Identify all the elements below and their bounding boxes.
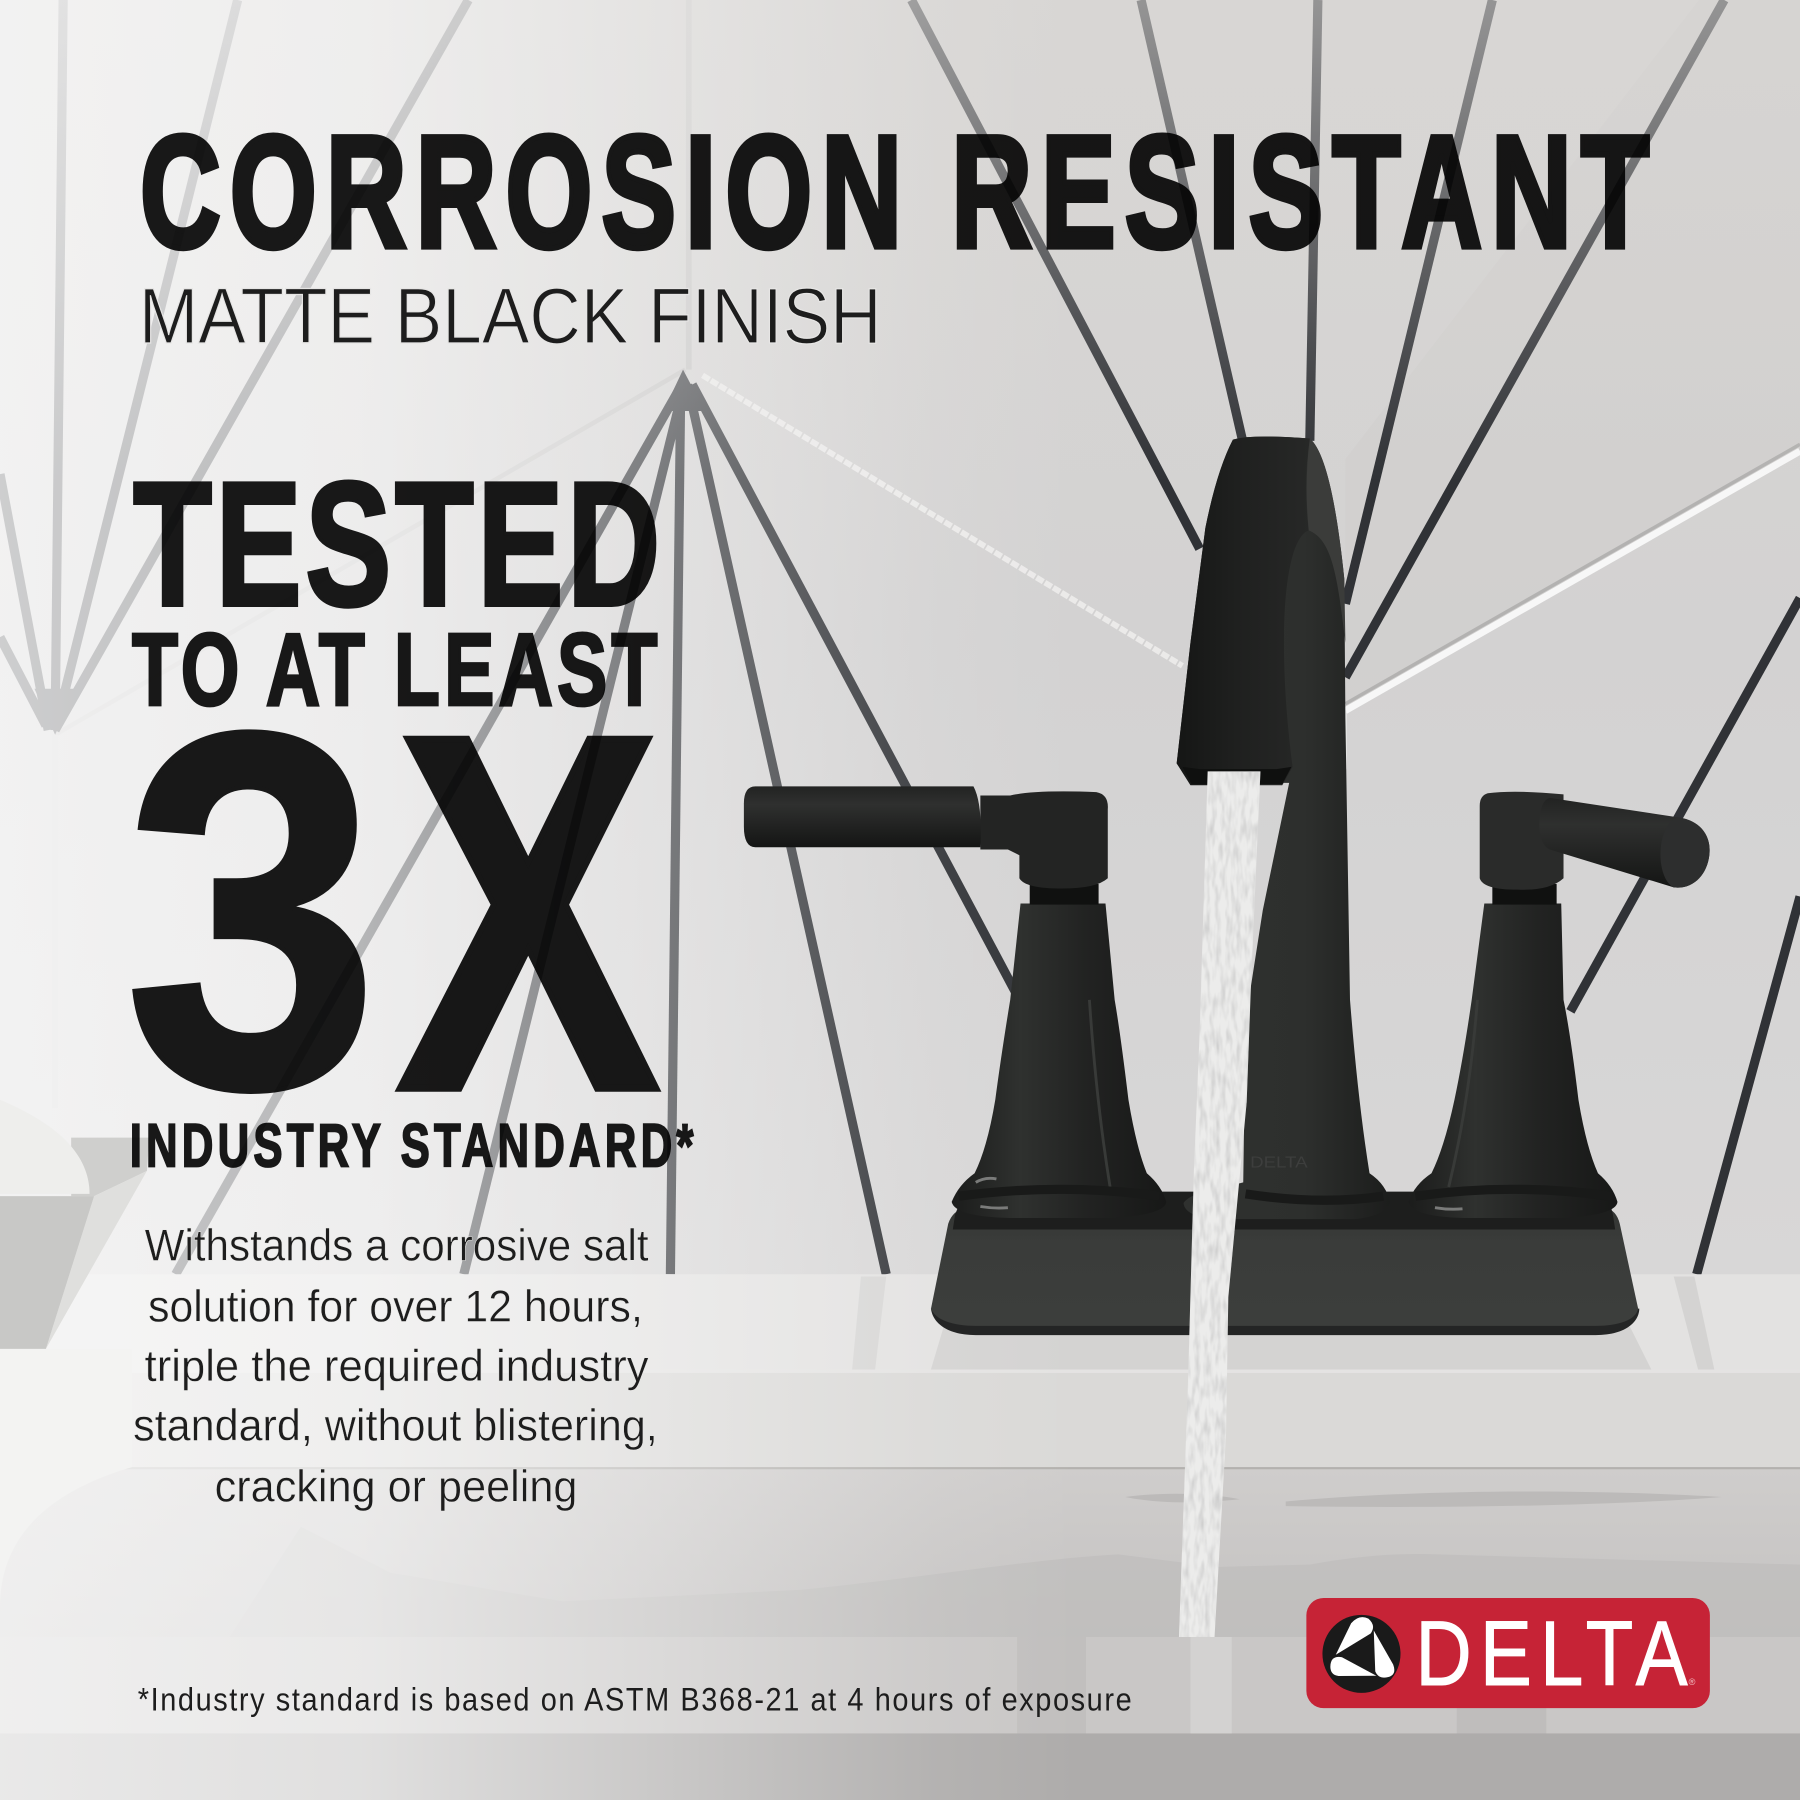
- left handle: [744, 786, 1166, 1218]
- title: corrosion resistant: CORROSION RESISTANT: [140, 103, 1649, 282]
- logo wordmark: DELTA: [1415, 1603, 1688, 1706]
- right hub: [1480, 792, 1564, 890]
- wall tile dark inlay lines: [0, 0, 1800, 1274]
- spout front face: [1177, 436, 1310, 785]
- big 3X figure: 3: [124, 627, 379, 1194]
- left lever: [744, 786, 981, 847]
- front rim panel: [0, 1637, 1800, 1736]
- tested: TESTED: [133, 445, 660, 643]
- to at least: TO AT LEAST: [132, 612, 657, 728]
- wall tile grout edges: [55, 0, 1800, 1108]
- industry standard: INDUSTRY STANDARD*: [130, 1112, 694, 1180]
- basin: [0, 1469, 1800, 1637]
- big 3X figure: [124, 627, 662, 1196]
- spout column: [1177, 436, 1390, 1219]
- right handle: [1409, 792, 1710, 1218]
- right lever: [1539, 798, 1710, 888]
- big 3X figure: X: [396, 630, 662, 1196]
- water reflection: [1190, 1637, 1232, 1733]
- left hub: [980, 791, 1108, 889]
- vertical fade at top of wall: [0, 0, 1800, 482]
- aerator outlet: [1182, 767, 1291, 784]
- body text: cracking or peeling: [215, 1463, 577, 1512]
- soap bar: [0, 1100, 90, 1194]
- counter front edge: [0, 1371, 1800, 1468]
- spout: [1177, 436, 1390, 1219]
- Delta logo: [1306, 1598, 1710, 1708]
- logo icon: [1322, 1615, 1401, 1693]
- left valve body: [952, 903, 1166, 1218]
- background: tiled wall: [0, 0, 1800, 1277]
- faucet: [744, 436, 1710, 1335]
- water stream: [1179, 771, 1260, 1733]
- body text: [133, 1221, 658, 1512]
- footnote: *Industry standard is based on ASTM B368-21 at 4 hours of exposure: [138, 1682, 1132, 1718]
- Delta logo: ®: [1689, 1677, 1696, 1687]
- claim block: tested to at least 3X: [124, 445, 694, 1196]
- body text: triple the required industry: [145, 1342, 649, 1391]
- deck plate: [931, 1192, 1639, 1335]
- counter top surface: [0, 1274, 1800, 1373]
- body text: Withstands a corrosive salt: [145, 1221, 649, 1270]
- vanity counter and sink: [0, 1274, 1800, 1800]
- logo mark on spout: DELTA: [1250, 1153, 1308, 1171]
- soap dish: [0, 1100, 149, 1349]
- body text: solution for over 12 hours,: [148, 1282, 643, 1331]
- spout rear arc: [1307, 439, 1345, 643]
- right valve body: [1409, 903, 1617, 1218]
- sink rim curve at left: [0, 1349, 132, 1607]
- subtitle: matte black finish: MATTE BLACK FINISH: [139, 271, 882, 360]
- body text: standard, without blistering,: [133, 1402, 658, 1451]
